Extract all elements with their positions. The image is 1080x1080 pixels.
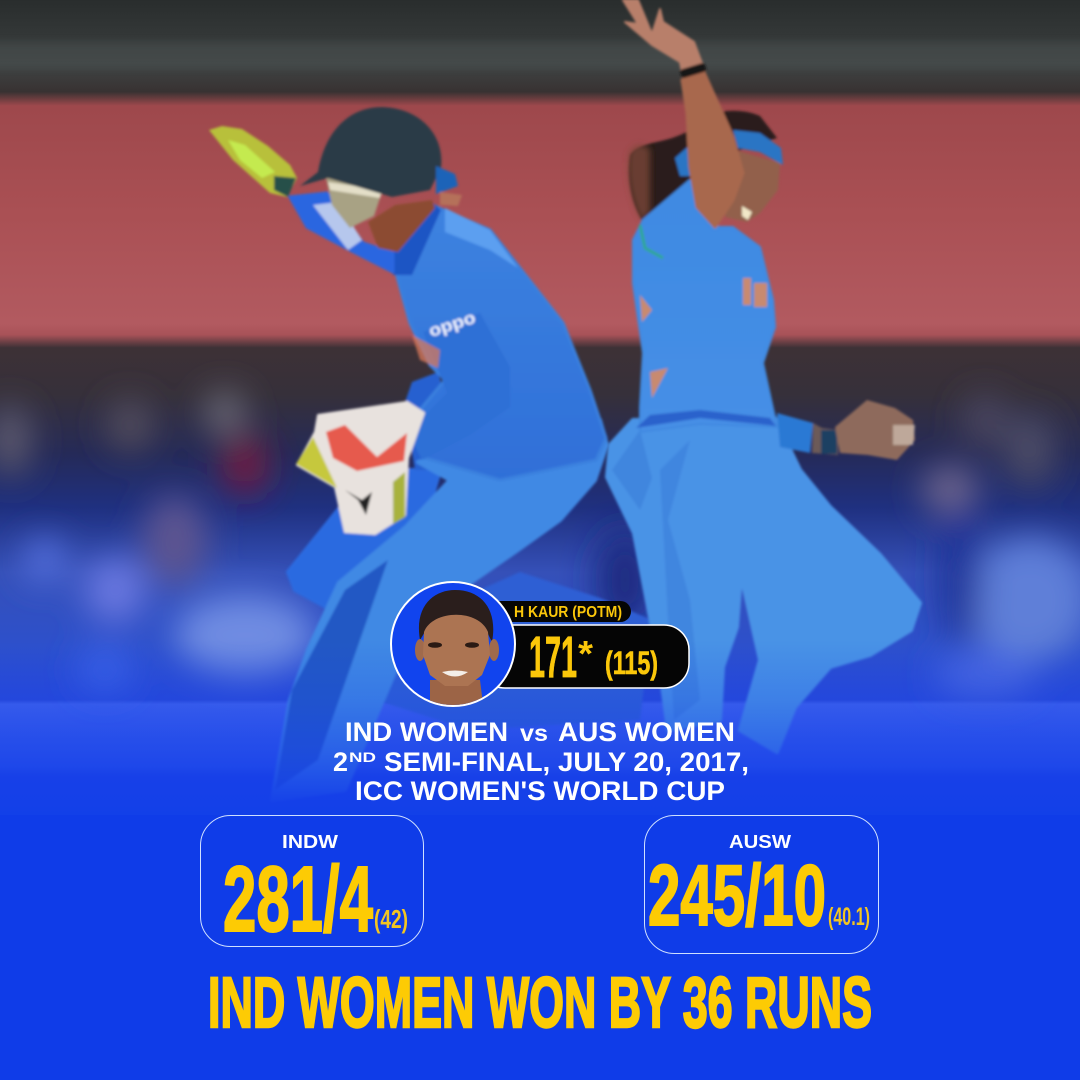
player: wicketkeeper group <box>209 107 652 800</box>
glove raised <box>209 126 297 197</box>
keeper trousers <box>272 420 607 800</box>
scorecard: Australia: 245/10 <box>648 848 826 944</box>
face <box>725 150 780 222</box>
second fielder behind keeper <box>288 470 440 607</box>
raised arm and hand <box>623 0 743 227</box>
match title: 2 <box>333 747 348 777</box>
helmet tie <box>436 166 458 194</box>
match title: SEMI-FINAL, JULY 20, 2017, <box>384 747 749 777</box>
wrist sleeve and hand <box>777 400 915 460</box>
blurred crowd <box>0 391 1080 699</box>
sponsor logo: oppo <box>426 308 478 341</box>
torso <box>633 180 777 432</box>
name tag: H KAUR (POTM) <box>514 604 622 621</box>
score pill: 171 <box>529 625 577 690</box>
match title: ND <box>349 749 376 765</box>
scorecard: India: (42) <box>374 904 408 934</box>
match title: vs <box>520 720 548 746</box>
scorecard: India: 281/4 <box>223 847 373 951</box>
name tag <box>490 601 631 622</box>
scorecard: India <box>200 816 424 951</box>
orange kit details <box>640 278 767 398</box>
scorecard: India: INDW <box>282 832 338 852</box>
scorecard: Australia: AUSW <box>729 832 791 852</box>
player: bowler <box>607 0 920 752</box>
face guard <box>313 202 362 250</box>
sleeve piping <box>640 225 663 258</box>
headband <box>733 130 783 165</box>
keeper arm <box>408 313 510 460</box>
match title <box>333 717 749 806</box>
lower blue gradient fade <box>0 640 1080 1080</box>
scorecard: Australia <box>644 816 878 954</box>
visor <box>326 178 384 228</box>
scorecard: Australia: (40.1) <box>828 903 870 931</box>
match title: AUS WOMEN <box>558 717 735 747</box>
score pill: * <box>578 633 593 674</box>
score pill <box>480 625 689 690</box>
keeper gloves <box>296 402 424 534</box>
trousers <box>607 418 920 752</box>
score callout: player of the match <box>391 582 689 712</box>
match title: ICC WOMEN'S WORLD CUP <box>355 776 725 806</box>
match title: IND WOMEN <box>345 717 508 747</box>
hair <box>628 111 777 222</box>
orange kit detail <box>412 335 440 368</box>
keeper torso <box>393 205 606 480</box>
raised arm <box>290 193 393 272</box>
neck <box>368 200 435 252</box>
helmet <box>300 107 441 197</box>
score pill: (115) <box>605 645 658 681</box>
portrait <box>391 582 515 712</box>
